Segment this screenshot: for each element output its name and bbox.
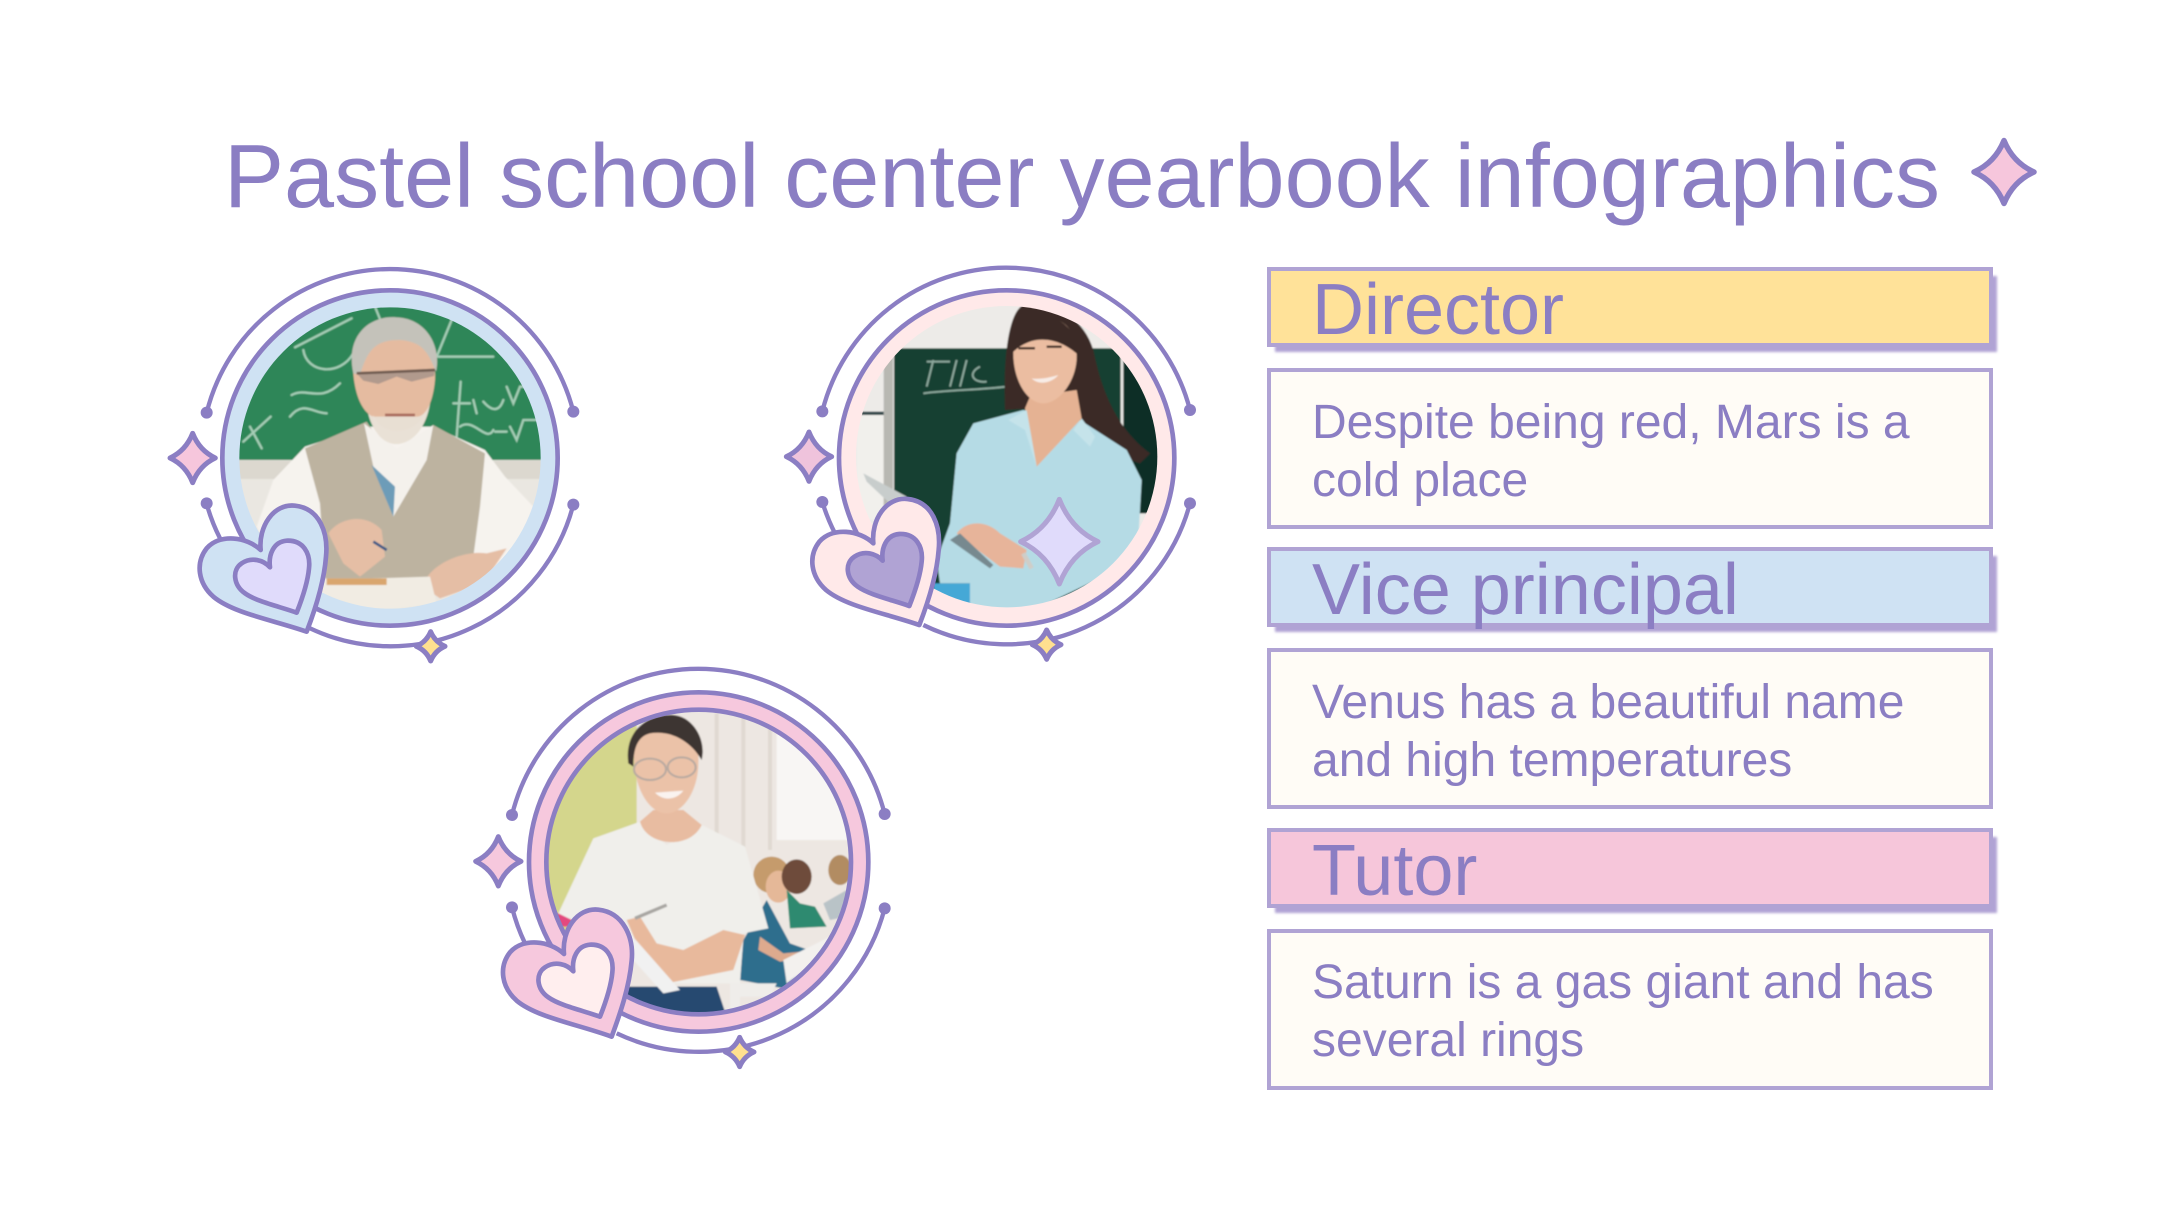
ring: inner photo outline [546, 710, 851, 1014]
panel: tutor description: several rings [1312, 1014, 1584, 1067]
photo: woman with tablet in classroom [853, 303, 1163, 615]
badge: tutor portrait [476, 669, 891, 1067]
panel: vice principal description: Venus has a beautiful name [1312, 676, 1904, 729]
icon: left sparkle [476, 837, 521, 886]
icon: photo sparkle [1021, 499, 1098, 584]
panel: director description: Despite being red, Mars is a [1312, 396, 1910, 449]
panel: vice principal description: and high temperatures [1312, 734, 1792, 787]
title: Pastel school center yearbook infographics [224, 127, 1940, 227]
panel: tutor heading [1269, 830, 1997, 913]
icon: bottom sparkle [416, 632, 445, 661]
icon: bottom sparkle [1032, 630, 1061, 659]
arcs: tutor orbit with dots [506, 669, 891, 1052]
icon: heart [200, 506, 326, 632]
panel: vice principal heading: Vice principal [1312, 550, 1739, 630]
icon: heart [812, 499, 939, 625]
ring: tutor [529, 692, 868, 1032]
ring: director [222, 290, 558, 626]
arcs: vice principal orbit with dots [816, 268, 1196, 644]
panel: director description: cold place [1312, 454, 1528, 507]
ring: vice principal [839, 290, 1174, 626]
panel: tutor description [1269, 931, 1991, 1088]
panel: tutor description: Saturn is a gas giant and has [1312, 956, 1934, 1009]
badge: vice principal portrait [786, 268, 1196, 659]
panel: tutor heading: Tutor [1312, 831, 1477, 911]
arcs: director orbit with dots [201, 269, 579, 646]
panel: vice principal heading [1269, 549, 1997, 632]
panel: vice principal description [1269, 650, 1991, 807]
panel: director heading [1269, 269, 1997, 352]
icon: title sparkle [1974, 140, 2034, 204]
icon: left sparkle [786, 432, 832, 481]
panel: director heading: Director [1312, 270, 1564, 350]
photo: older teacher at chalkboard [233, 303, 547, 613]
icon: bottom sparkle [725, 1037, 754, 1067]
icon: left sparkle [170, 433, 215, 483]
badge: director portrait [170, 269, 579, 661]
photo: smiling tutor with children behind [547, 711, 850, 1013]
icon: heart [503, 910, 632, 1037]
panel: director description [1269, 370, 1991, 527]
